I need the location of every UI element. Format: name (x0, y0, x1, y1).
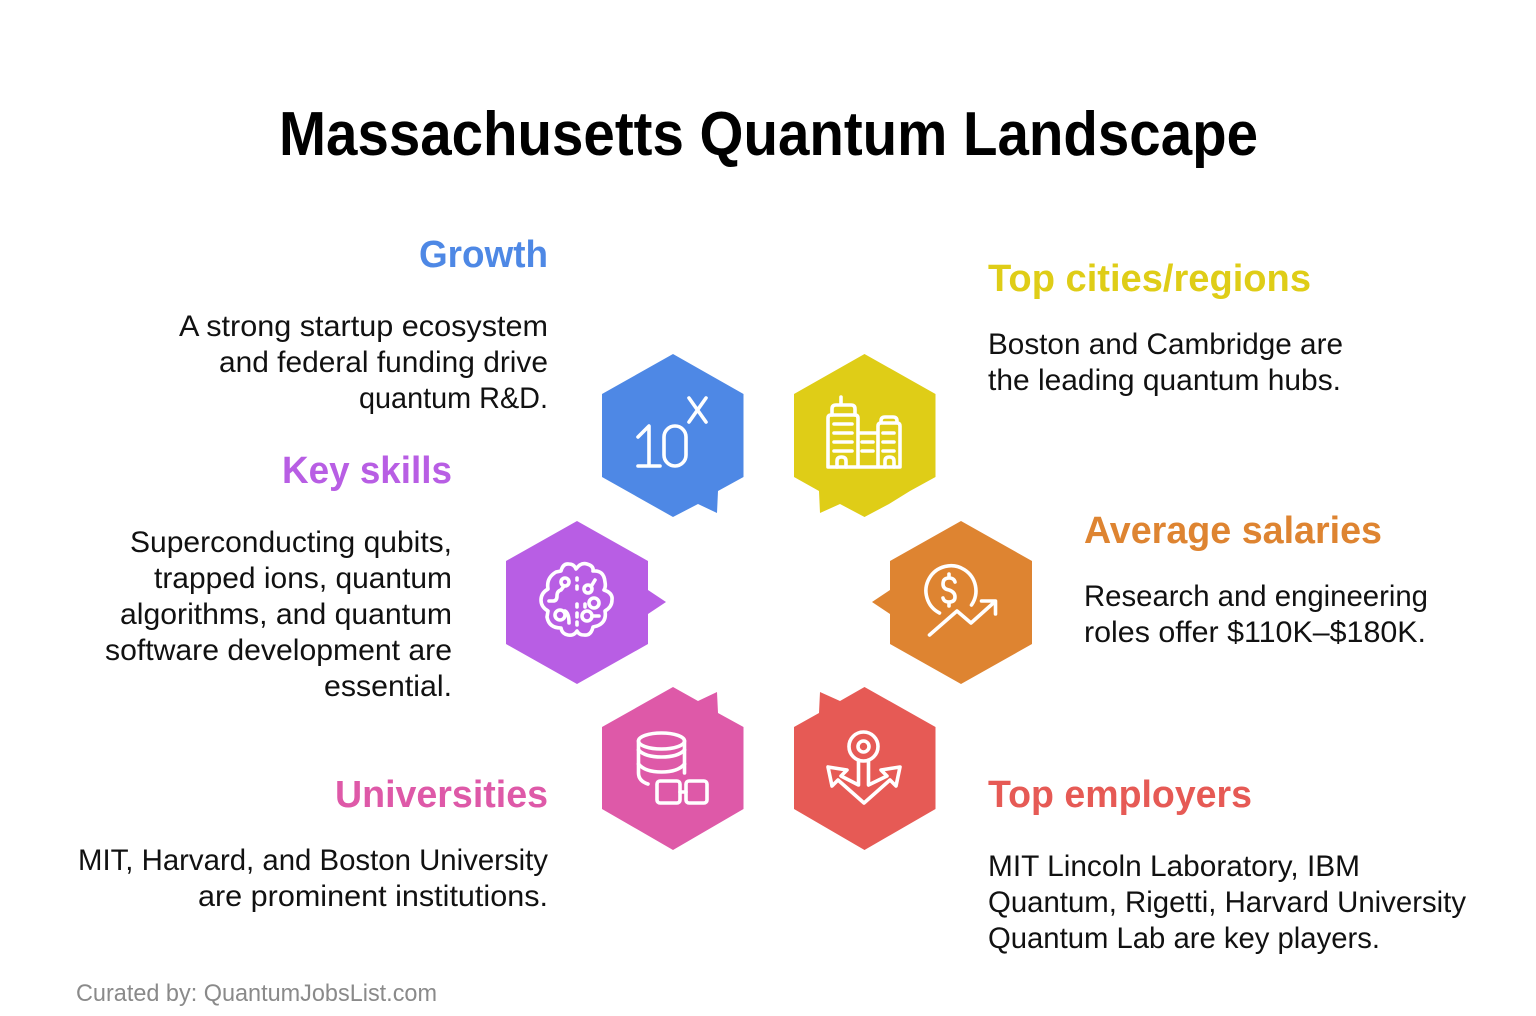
text block: key skills description: software development are (105, 634, 452, 667)
text block: key skills description: algorithms, and quantum (120, 598, 452, 631)
blue hexagon with 10x icon (602, 354, 744, 517)
text block: top cities description (988, 328, 1343, 397)
panel: top employers text (988, 774, 1466, 955)
panel: growth text (179, 234, 548, 415)
text block: salaries description: Research and engineering (1084, 580, 1428, 613)
text block: top cities description: Boston and Cambridge are (988, 328, 1343, 361)
text block: top cities description: the leading quantum hubs. (988, 364, 1341, 397)
text block: employers description: MIT Lincoln Laboratory, IBM (988, 850, 1360, 883)
pink hexagon with database icon (602, 687, 744, 850)
text block: universities description: are prominent institutions. (198, 880, 548, 913)
purple hexagon with brain icon (506, 521, 666, 684)
text block: growth description (179, 310, 548, 415)
text block: universities description (78, 844, 548, 913)
text block: employers description (988, 850, 1466, 955)
text block: growth description: and federal funding drive (219, 346, 548, 379)
red hexagon with anchor icon (794, 687, 936, 850)
text block: salaries description (1084, 580, 1428, 649)
text block: universities description: MIT, Harvard, and Boston University (78, 844, 548, 877)
yellow hexagon with city buildings icon (794, 354, 936, 517)
title: Massachusetts Quantum Landscape (279, 100, 1258, 169)
text block: employers description: Quantum Lab are key players. (988, 922, 1380, 955)
text block: employers description: Quantum, Rigetti, Harvard University (988, 886, 1466, 919)
text block: salaries description: roles offer $110K–$180K. (1084, 616, 1426, 649)
heading: universities: Universities (335, 774, 548, 816)
heading: key skills: Key skills (282, 450, 452, 492)
panel: top cities text (988, 258, 1343, 397)
text block: growth description: A strong startup ecosystem (179, 310, 548, 343)
heading: average salaries: Average salaries (1084, 510, 1382, 552)
text block: growth description: quantum R&D. (359, 382, 548, 415)
text block: key skills description: trapped ions, quantum (154, 562, 452, 595)
text block: key skills description: Superconducting qubits, (130, 526, 452, 559)
text block: key skills description (105, 526, 452, 703)
orange hexagon with salary growth icon (872, 521, 1032, 684)
text block: key skills description: essential. (324, 670, 452, 703)
attribution credit: Curated by: QuantumJobsList.com (76, 980, 437, 1007)
heading: growth: Growth (419, 234, 548, 276)
panel: key skills text (105, 450, 452, 703)
heading: top employers: Top employers (988, 774, 1252, 816)
panel: average salaries text (1084, 510, 1428, 649)
panel: universities text (78, 774, 548, 913)
heading: top cities/regions: Top cities/regions (988, 258, 1311, 300)
